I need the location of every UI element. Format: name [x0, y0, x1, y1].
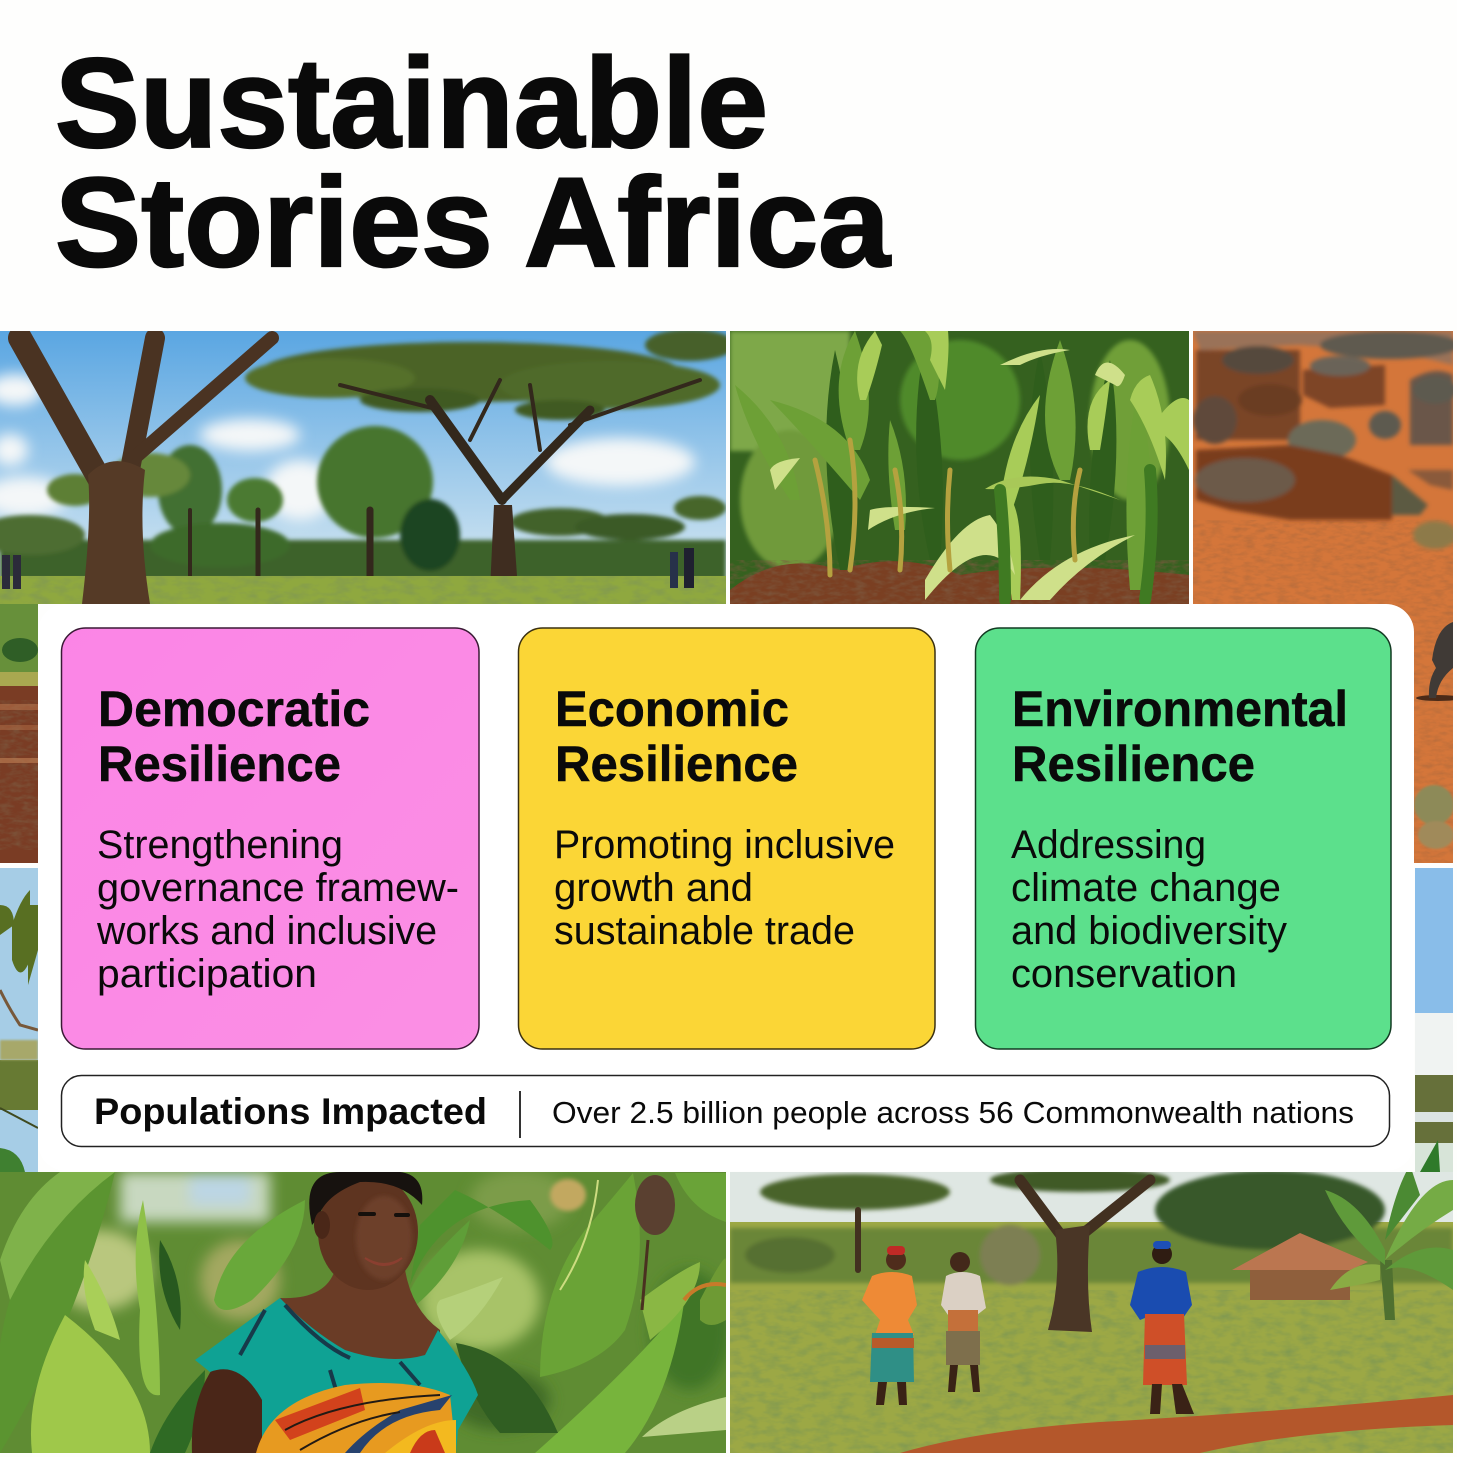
card: democratic resilience: Strengthening [97, 823, 343, 867]
elephant leg on right strip [1416, 622, 1457, 701]
populations impacted bar [62, 1076, 1390, 1146]
card: economic resilience: Promoting inclusive [554, 823, 895, 867]
photo: eroded red earth [1193, 331, 1457, 863]
card: economic resilience [518, 628, 935, 1049]
card: economic resilience: Economic [555, 681, 789, 737]
photo strip: left soil and shrubs [0, 604, 38, 863]
shrubs on red earth [1414, 785, 1454, 849]
card: environmental resilience: Resilience [1012, 736, 1255, 792]
populations impacted bar: Over 2.5 billion people across 56 Commonwealth nations [552, 1095, 1354, 1130]
title [55, 32, 891, 293]
photo: acacia savanna landscape [0, 329, 735, 604]
card: economic resilience: sustainable trade [554, 909, 855, 953]
photo: farmer woman among banana leaves [0, 1170, 730, 1453]
woman [192, 1172, 478, 1453]
card: environmental resilience: Environmental [1012, 681, 1348, 737]
card: democratic resilience: governance framew- [97, 866, 459, 910]
card: economic resilience: Resilience [555, 736, 798, 792]
white content panel [38, 604, 1414, 1171]
card: democratic resilience: Resilience [98, 736, 341, 792]
photo strip: right sky and tree [1415, 868, 1453, 1172]
card: environmental resilience: climate change [1011, 866, 1281, 910]
populations impacted bar: Populations Impacted [94, 1091, 487, 1132]
card: democratic resilience: works and inclusive [96, 909, 437, 953]
card: economic resilience: growth and [554, 866, 753, 910]
banana plants [1325, 1165, 1453, 1320]
title: Sustainable [55, 32, 768, 174]
card: environmental resilience: and biodiversity [1011, 909, 1287, 953]
photo: villagers in savanna clearing [730, 1165, 1453, 1453]
title: Stories Africa [55, 151, 891, 293]
photo: maize field [730, 331, 1189, 604]
three villagers [862, 1241, 1194, 1414]
card: democratic resilience [62, 628, 479, 1049]
card: environmental resilience: Addressing [1011, 823, 1206, 867]
hut [1232, 1233, 1368, 1300]
card: democratic resilience: Democratic [98, 681, 370, 737]
card: democratic resilience: participation [97, 952, 317, 996]
card: environmental resilience: conservation [1011, 952, 1237, 996]
card: environmental resilience [976, 628, 1391, 1049]
photo strip: left foliage [0, 868, 38, 1172]
